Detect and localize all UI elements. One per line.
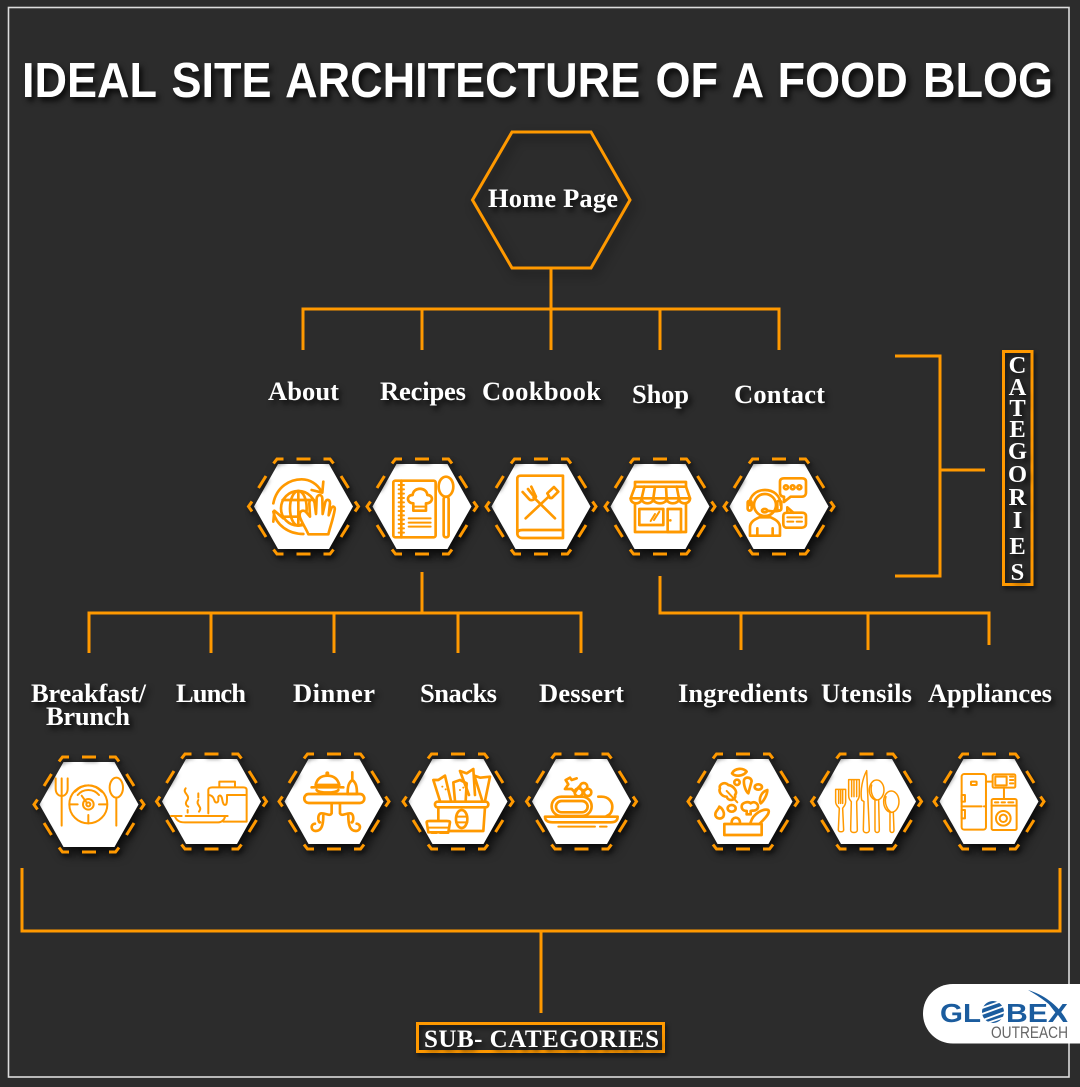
category labels [268,376,825,409]
icon: plate with fork and spoon [56,778,123,826]
node: contact [724,459,834,554]
hexagon [688,754,798,849]
vertical label: A [1009,374,1027,401]
vertical label: R [1009,484,1027,511]
icon: table with cloche and bottle [304,771,364,831]
icon: basket of bread sticks [427,769,490,833]
label breakfast brunch: Breakfast/ [31,678,147,708]
vertical label: C [1009,352,1026,379]
vertical label: E [1009,533,1026,560]
icon: globe and hand [273,479,335,534]
label about: About [268,376,339,406]
label snacks: Snacks [420,678,497,708]
vertical label: I [1013,507,1022,534]
vertical label: S [1011,559,1024,586]
hexagon [279,754,389,849]
node: cookbook [486,459,596,554]
icon: kitchen appliances [962,774,1017,830]
node: appliances [934,754,1044,849]
node: dinner [279,754,389,849]
icon: support agent with chat bubbles [748,478,806,536]
icon: cookbook with utensils [517,476,563,538]
hexagon [34,757,144,852]
logo: globex outreach [923,984,1080,1044]
node: about [248,459,358,554]
node: recipes [367,459,477,554]
vertical label: O [1008,461,1027,488]
hexagon [812,754,922,849]
logo text bex: BEX [1006,998,1069,1028]
hexagon [724,459,834,554]
node: snacks [403,754,513,849]
vertical label: T [1009,395,1026,422]
label cookbook: Cookbook [482,376,601,406]
hexagon [605,459,715,554]
box outline [1004,352,1032,584]
label dinner: Dinner [293,678,375,708]
label lunch: Lunch [176,678,246,708]
icon: vegetables over a pan [715,769,769,835]
label contact: Contact [734,379,825,409]
label dessert: Dessert [539,678,624,708]
categories box [1004,352,1032,586]
connector: home to categories [303,268,779,350]
icon: recipe book and spoon [393,477,453,537]
hexagon [367,459,477,554]
node: dessert [526,754,636,849]
logo globe [982,1001,1005,1023]
node: lunch [156,754,266,849]
hexagon outline [472,132,630,268]
hexagon [403,754,513,849]
node: breakfast [34,757,144,852]
label recipes: Recipes [380,376,466,406]
box outline [418,1024,664,1052]
logo pill [923,984,1080,1044]
connector: shop to sub-categories [660,576,989,650]
connector: recipes to sub-categories [89,572,581,653]
label appliances: Appliances [928,678,1052,708]
bracket: sub-categories [22,868,1060,1013]
icon: cutlery set [836,771,899,833]
hexagon [934,754,1044,849]
vertical label: E [1009,416,1026,443]
label brunch second line: Brunch [46,701,130,731]
logo swoosh [1028,990,1067,1021]
icon: storefront [631,482,690,532]
sub-category labels [31,678,1052,731]
node: home page [472,132,630,268]
hexagon [248,459,358,554]
logo text gl: GL [940,998,981,1028]
hexagon [526,754,636,849]
vertical label: G [1008,438,1027,465]
home page label: Home Page [488,183,618,213]
label ingredients: Ingredients [678,678,808,708]
bracket: categories [895,356,985,576]
box label: SUB- CATEGORIES [424,1026,659,1053]
hexagon [486,459,596,554]
node: shop [605,459,715,554]
label shop: Shop [632,379,689,409]
node: ingredients [688,754,798,849]
sub-categories box [418,1024,664,1053]
icon: cake roll with grapes [545,778,618,827]
label utensils: Utensils [821,678,912,708]
node: utensils [812,754,922,849]
hexagon [156,754,266,849]
icon: pot, plate and steam [171,782,247,822]
